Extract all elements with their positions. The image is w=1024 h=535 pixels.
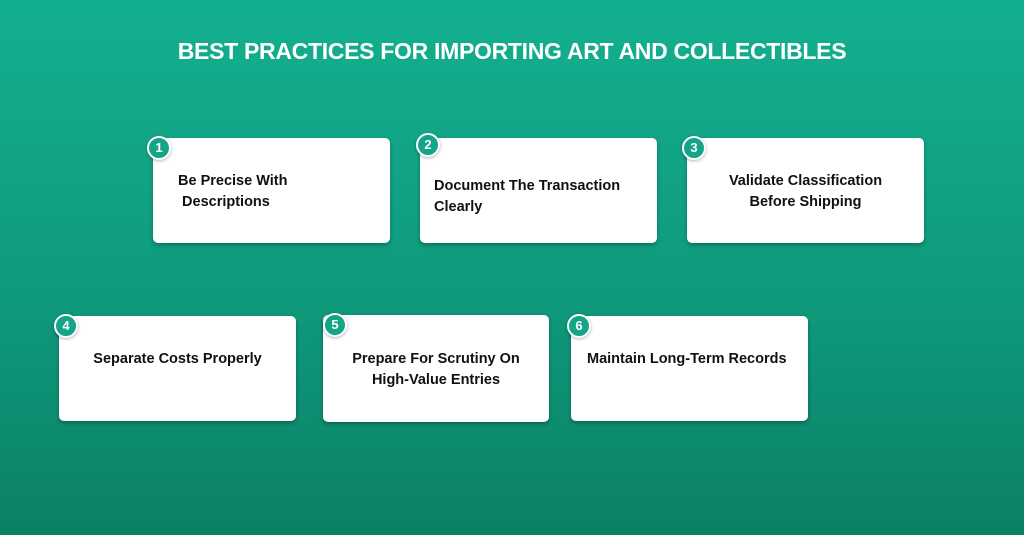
card 1 [153, 138, 390, 243]
text 5: Prepare For Scrutiny On [352, 351, 520, 367]
text 1: Be Precise With [178, 173, 287, 189]
card 5 [323, 315, 549, 422]
badge 2 [416, 133, 440, 157]
badge 4: 4 [62, 318, 70, 333]
card 6 [571, 316, 808, 421]
text 2: Document The Transaction [434, 178, 620, 194]
badge 5: 5 [331, 317, 339, 332]
badge 6: 6 [575, 318, 583, 333]
badge 5 [323, 313, 347, 337]
badge 1: 1 [155, 140, 163, 155]
text 5: High-Value Entries [372, 372, 500, 388]
card 3 [687, 138, 924, 243]
badge 3: 3 [690, 140, 698, 155]
badge 6 [567, 314, 591, 338]
text 2: Clearly [434, 199, 482, 215]
text 6: Maintain Long-Term Records [587, 351, 787, 367]
text 5 [352, 351, 520, 388]
text 1 [178, 173, 287, 210]
text 3 [729, 173, 882, 210]
title: BEST PRACTICES FOR IMPORTING ART AND COLLECTIBLES [178, 38, 846, 64]
text 2 [434, 178, 620, 215]
badge 1 [147, 136, 171, 160]
text 4: Separate Costs Properly [93, 351, 262, 367]
badge 4 [54, 314, 78, 338]
card 4 [59, 316, 296, 421]
card 2 [420, 138, 657, 243]
text 1: Descriptions [182, 194, 270, 210]
badge 2: 2 [424, 137, 432, 152]
badge 3 [682, 136, 706, 160]
text 3: Before Shipping [750, 194, 861, 210]
text 3: Validate Classification [729, 173, 882, 189]
